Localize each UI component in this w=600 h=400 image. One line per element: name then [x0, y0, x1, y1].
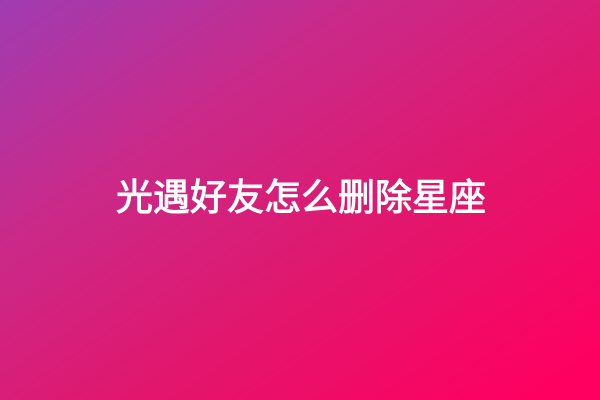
title: 光遇好友怎么删除星座 — [116, 177, 486, 218]
